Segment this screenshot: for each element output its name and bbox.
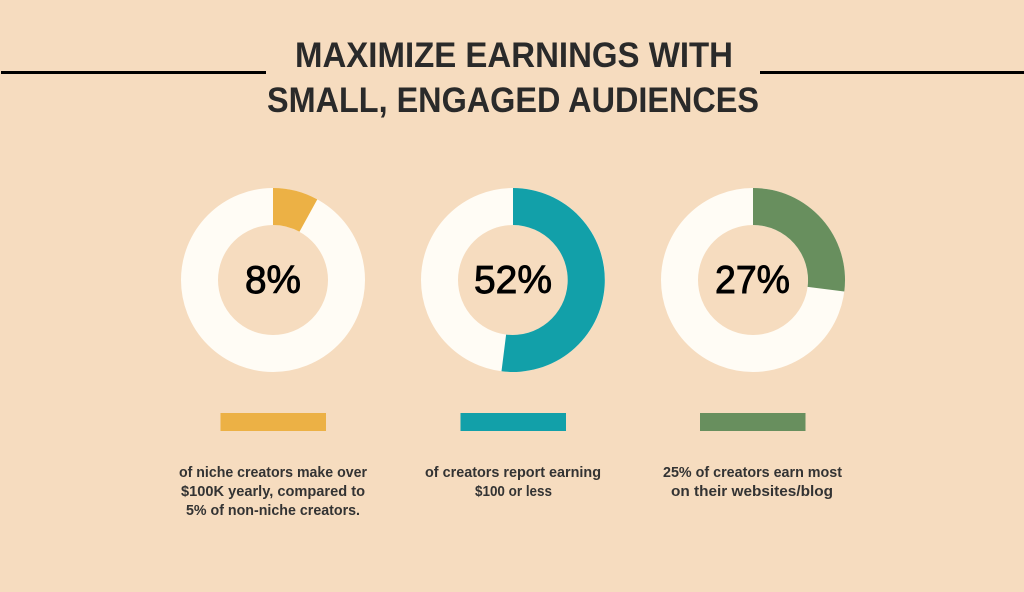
donut chart: 27% — [680, 188, 845, 354]
caption: niche creators: of niche creators make over — [179, 465, 367, 481]
caption: niche creators: $100K yearly, compared to — [181, 484, 365, 500]
caption: websites and blogs — [663, 465, 842, 500]
panel: 27 percent — [663, 188, 845, 500]
colour bar: teal — [460, 413, 566, 431]
colour bar: yellow — [220, 413, 326, 431]
caption: websites and blogs: on their websites/blog — [671, 484, 833, 500]
caption: websites and blogs: 25% of creators earn most — [663, 465, 842, 481]
caption: niche creators — [179, 465, 367, 519]
caption: earning $100 or less: $100 or less — [475, 484, 552, 500]
value: 27%: 27% — [715, 259, 790, 302]
colour bar: green — [700, 413, 806, 431]
title — [267, 36, 759, 120]
value: 8%: 8% — [245, 259, 301, 302]
panel: 52 percent — [425, 188, 605, 500]
donut chart: 8% — [200, 188, 346, 354]
donut chart: 52% — [440, 188, 605, 372]
title: MAXIMIZE EARNINGS WITH — [295, 36, 733, 75]
title: SMALL, ENGAGED AUDIENCES — [267, 81, 759, 120]
panel: 8 percent — [179, 188, 367, 519]
caption: niche creators: 5% of non-niche creators. — [186, 503, 360, 519]
caption: earning $100 or less — [425, 465, 601, 500]
value: 52%: 52% — [474, 259, 552, 302]
caption: earning $100 or less: of creators report earning — [425, 465, 601, 481]
